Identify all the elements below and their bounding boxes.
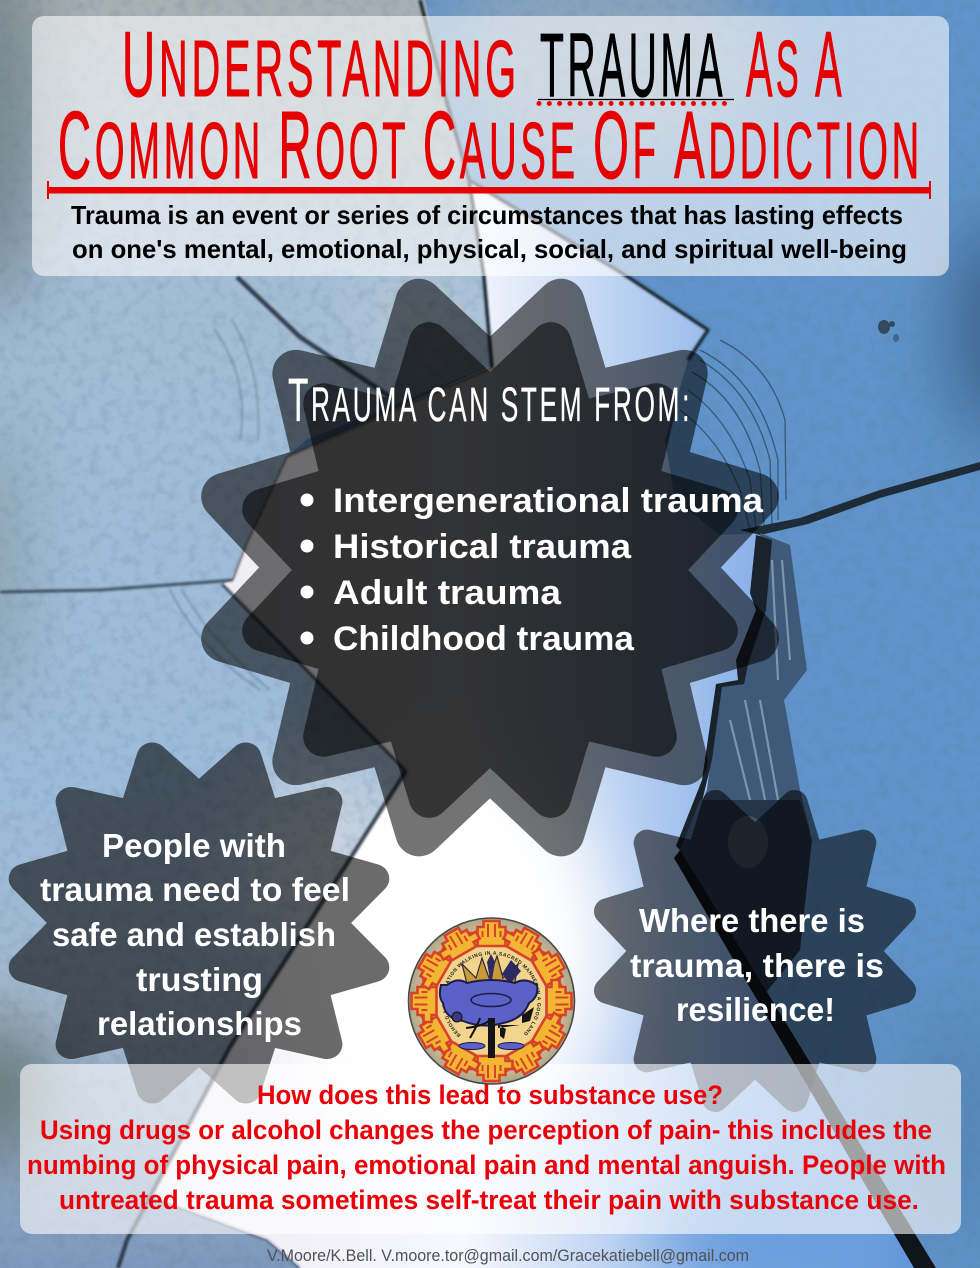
bullet list: Historical trauma [333, 528, 632, 566]
seal circular motto: BEHOLD A GOOD NATION WALKING IN A SACRED MANNER IN A GOOD LAND [442, 951, 541, 1038]
left star text [40, 827, 350, 1042]
title line 1: UNDERSTANDING [122, 13, 520, 116]
curved glass scratches [680, 340, 786, 530]
hole behind the glass [150, 183, 914, 1268]
footer credits: V.Moore/K.Bell. V.moore.tor@gmail.com/Gracekatiebell@gmail.com [267, 1246, 749, 1265]
title line 2: COMMON ROOT CAUSE OF ADDICTION [58, 92, 923, 198]
right star text: trauma, there is [630, 947, 884, 984]
subtitle definition [71, 200, 907, 264]
panel: title header [32, 13, 949, 276]
dotted underline under TRAUMA [538, 100, 734, 104]
outer star shape [201, 279, 779, 856]
long right crack [740, 462, 980, 535]
bullet list: Intergenerational trauma [333, 482, 764, 520]
heading: trauma can stem from: TRAUMA CAN STEM FROM: [288, 366, 692, 434]
left star text: trauma need to feel [40, 871, 350, 908]
cracks [0, 0, 708, 1268]
explanation text: untreated trauma sometimes self-treat their pain with substance use. [59, 1185, 919, 1215]
seal central emblem [440, 954, 537, 1058]
black diagonal crack [674, 850, 936, 1268]
inner star shape [242, 322, 738, 818]
right star text: Where there is [639, 902, 865, 939]
title line 1 [122, 13, 845, 116]
subtitle definition: on one's mental, emotional, physical, social, and spiritual well-being [72, 234, 907, 264]
bullet list: Adult trauma [333, 574, 562, 612]
explanation text [27, 1115, 946, 1215]
small chip [878, 320, 899, 342]
question heading: How does this lead to substance use? [257, 1080, 723, 1110]
red rule under title [47, 181, 931, 199]
silver shard [676, 533, 812, 1000]
panel: right star, resilience [594, 790, 916, 1112]
right glass shading [430, 0, 980, 1240]
subtitle definition: Trauma is an event or series of circumstances that has lasting effects [71, 200, 903, 230]
explanation text: Using drugs or alcohol changes the perception of pain- this includes the [40, 1115, 932, 1145]
right star text [630, 902, 884, 1028]
left star text: trusting [136, 961, 263, 998]
bullet list: Childhood trauma [333, 620, 635, 658]
title line 1: AS A [746, 13, 845, 116]
left star text: safe and establish [52, 916, 336, 953]
title line 1: TRAUMA [540, 14, 726, 115]
panel: bottom substance use explanation [20, 1064, 961, 1234]
left glass [0, 0, 530, 1268]
right star text: resilience! [676, 991, 835, 1028]
bullet list [300, 482, 764, 658]
panel: large star, causes of trauma [201, 279, 779, 856]
icon: circular tribal seal logo [408, 917, 576, 1085]
left star text: People with [102, 827, 286, 864]
seal stepped border motifs [412, 921, 572, 1081]
panel: left star, safety and trust [9, 742, 389, 1104]
explanation text: numbing of physical pain, emotional pain and mental anguish. People with [27, 1150, 946, 1180]
left star text: relationships [97, 1005, 302, 1042]
